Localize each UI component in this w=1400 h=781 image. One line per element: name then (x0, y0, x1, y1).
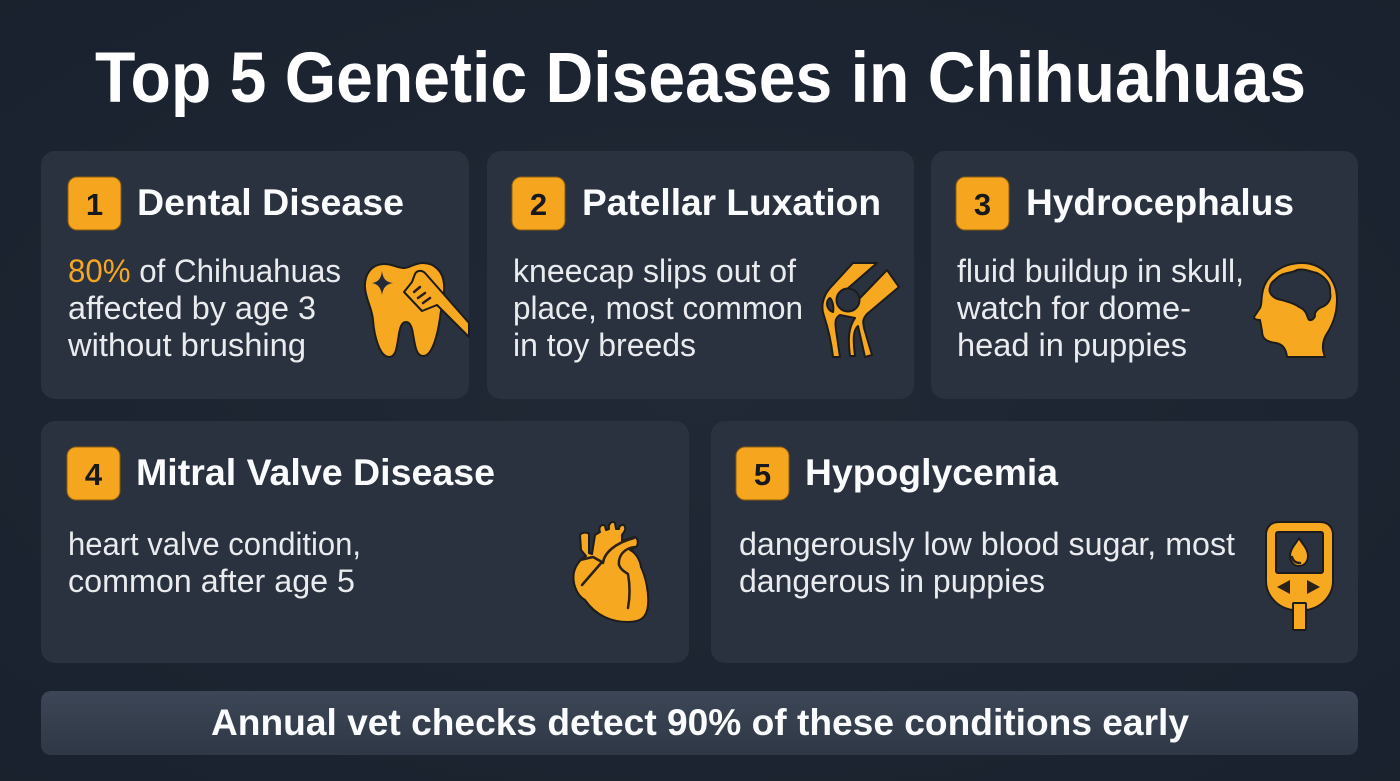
text: patellar luxation description: place, most common (513, 290, 803, 326)
text: dental disease description: without brushing (67, 327, 306, 363)
text: patellar luxation description (513, 253, 803, 363)
badge 5: 5 (754, 457, 771, 492)
text: hypoglycemia description (739, 526, 1235, 599)
banner text: Annual vet checks detect 90% of these conditions early (211, 702, 1189, 743)
icon: knee joint (822, 263, 899, 357)
badge 4: 4 (85, 457, 103, 492)
icon: tooth with toothbrush (365, 263, 469, 357)
badge 2 (512, 177, 565, 230)
panel: hypoglycemia (711, 421, 1358, 663)
text: dental disease description: affected by age 3 (68, 290, 316, 326)
icon: head with brain (1254, 263, 1337, 357)
badge 5 (736, 447, 789, 500)
badge 3 (956, 177, 1009, 230)
heading: hypoglycemia: Hypoglycemia (805, 452, 1058, 493)
text: mitral valve description (68, 526, 361, 599)
text: dental disease description: 80% of Chihuahuas (68, 253, 341, 289)
panel: mitral valve disease (41, 421, 689, 663)
text: hydrocephalus description: fluid buildup in skull, (957, 253, 1244, 289)
banner: annual vet checks (41, 691, 1358, 755)
badge 1: 1 (86, 187, 103, 222)
heading: mitral valve disease: Mitral Valve Disease (136, 452, 495, 493)
title: Top 5 Genetic Diseases in Chihuahuas (95, 39, 1306, 118)
heading: hydrocephalus: Hydrocephalus (1026, 182, 1294, 223)
panel: hydrocephalus (931, 151, 1358, 399)
text: hypoglycemia description: dangerously low blood sugar, most (739, 526, 1235, 562)
badge 3: 3 (974, 187, 991, 222)
heading: dental disease: Dental Disease (137, 182, 404, 223)
badge 2: 2 (530, 187, 547, 222)
text: patellar luxation description: in toy breeds (513, 327, 696, 363)
icon: heart (573, 522, 648, 622)
heading: patellar luxation: Patellar Luxation (582, 182, 881, 223)
icon: glucose meter (1266, 522, 1333, 630)
badge 4 (67, 447, 120, 500)
panel: patellar luxation (487, 151, 914, 399)
text: mitral valve description: heart valve condition, (68, 526, 361, 562)
text: mitral valve description: common after age 5 (68, 563, 355, 599)
text: hydrocephalus description: head in puppies (957, 327, 1187, 363)
badge 1 (68, 177, 121, 230)
text: hypoglycemia description: dangerous in puppies (739, 563, 1045, 599)
text: dental disease description (67, 253, 341, 363)
panel: dental disease (41, 151, 469, 399)
text: patellar luxation description: kneecap slips out of (513, 253, 796, 289)
text: hydrocephalus description: watch for dome- (956, 290, 1191, 326)
text: hydrocephalus description (956, 253, 1244, 363)
